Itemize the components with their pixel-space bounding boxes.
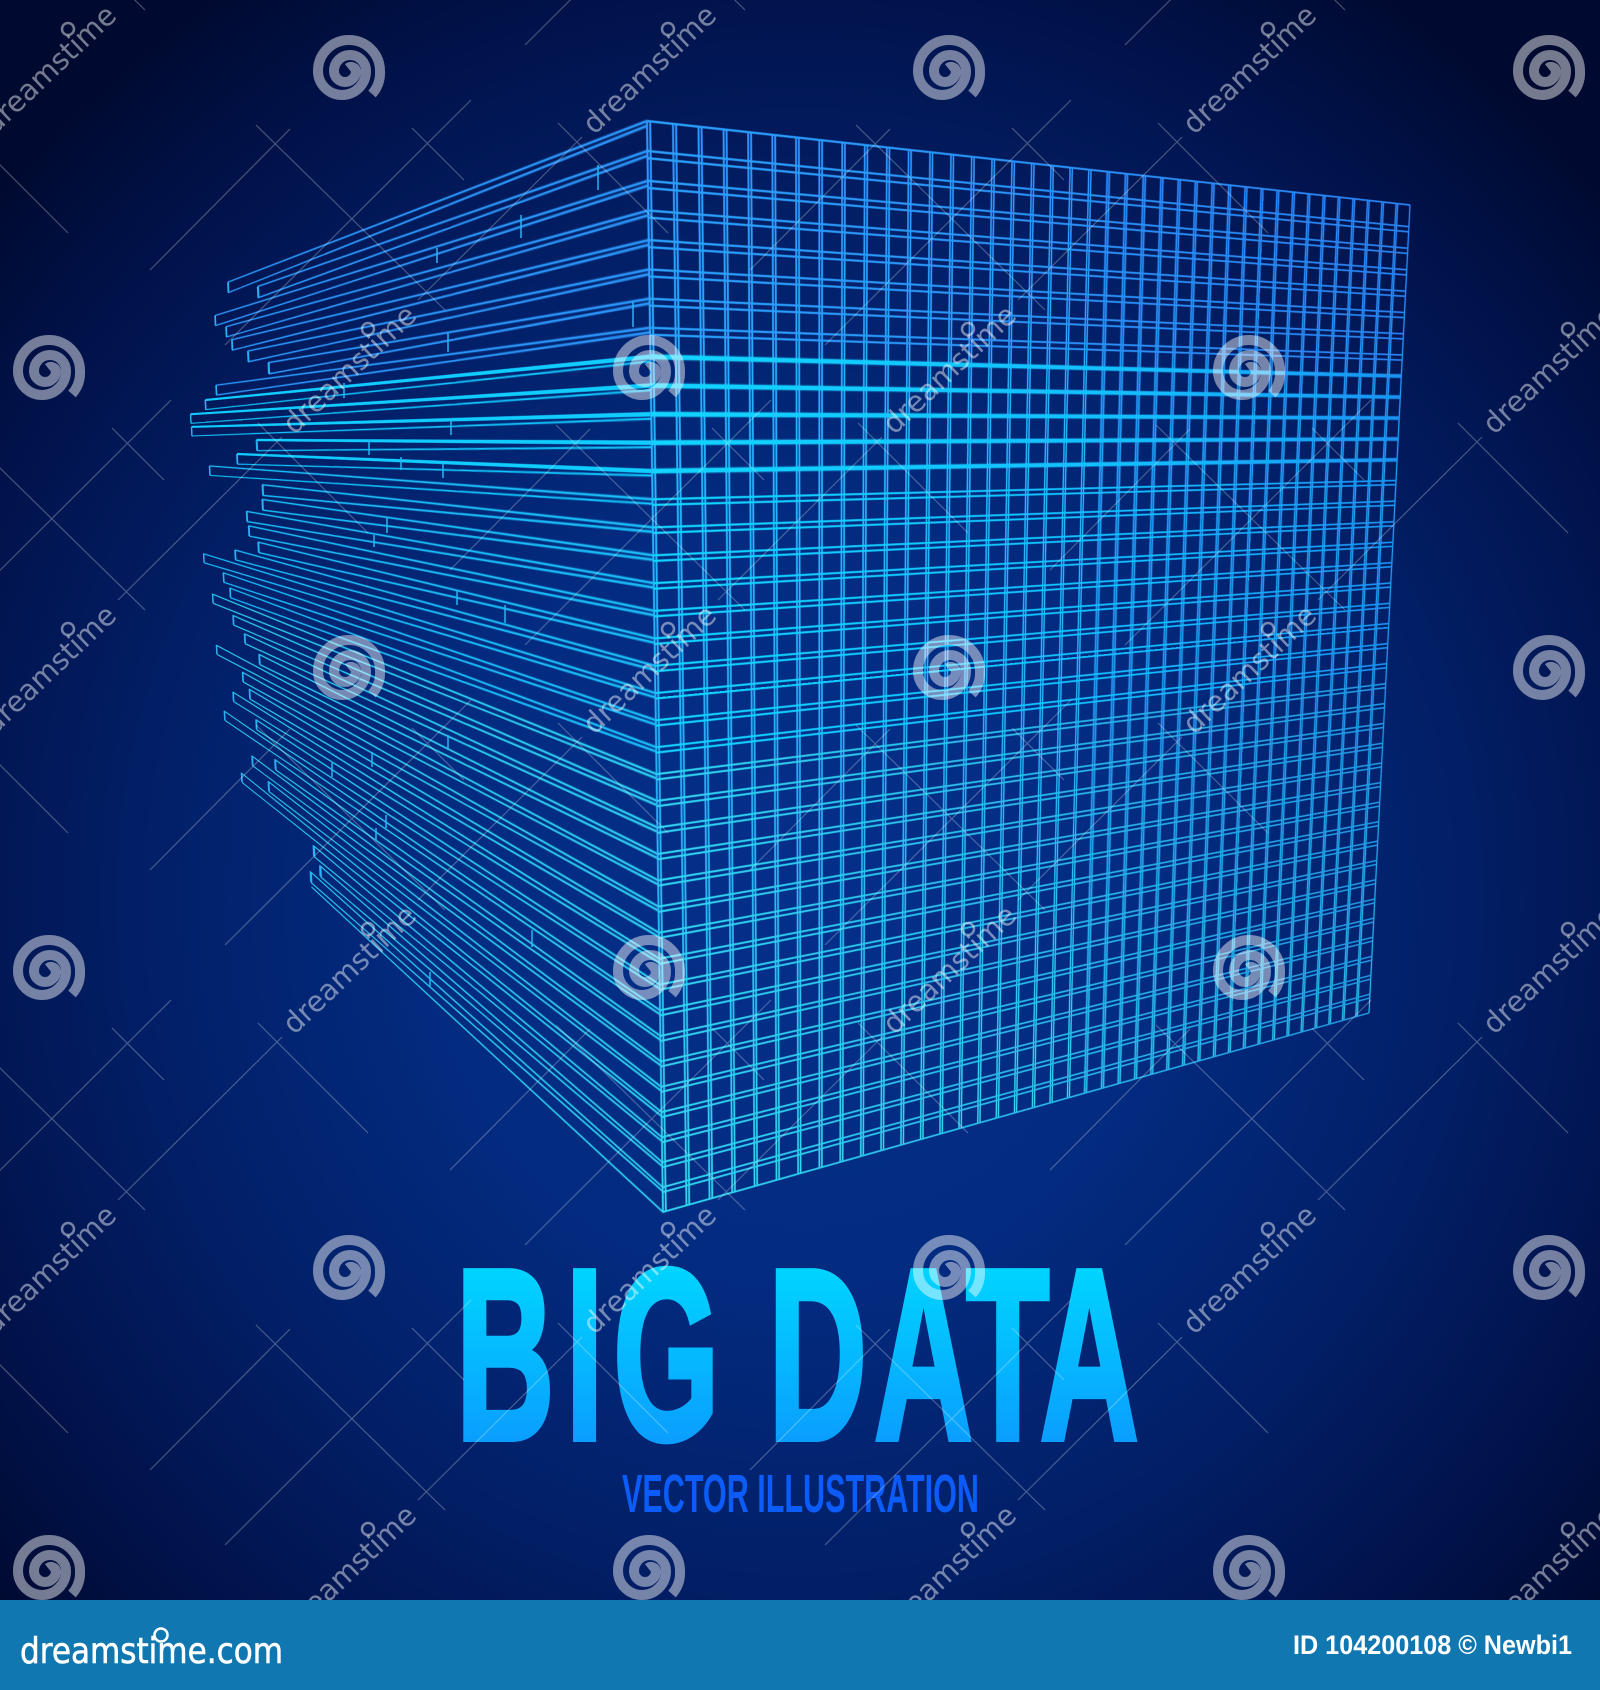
lower rows	[657, 684, 1386, 1212]
left columns	[647, 121, 1091, 1212]
medium rows	[653, 481, 1396, 753]
top rows	[647, 121, 1410, 360]
image id and credit: ID 104200108 © Newbi1	[1293, 1630, 1572, 1660]
title: BIG DATA: BIG DATA	[456, 1218, 1139, 1491]
panel: cube front face wire grid	[646, 120, 1412, 1214]
subtitle: VECTOR ILLUSTRATION: VECTOR ILLUSTRATION	[622, 1464, 979, 1524]
icon: footer logo spiral	[154, 1628, 168, 1642]
slab step caps on side face	[332, 165, 633, 987]
footer logo text: dreamstime.com	[20, 1631, 283, 1672]
footer bar	[0, 1600, 1600, 1690]
panel: cube left side face with stepped slabs	[190, 118, 664, 1214]
right columns	[1085, 172, 1410, 1093]
bright middle rows	[650, 357, 1401, 471]
